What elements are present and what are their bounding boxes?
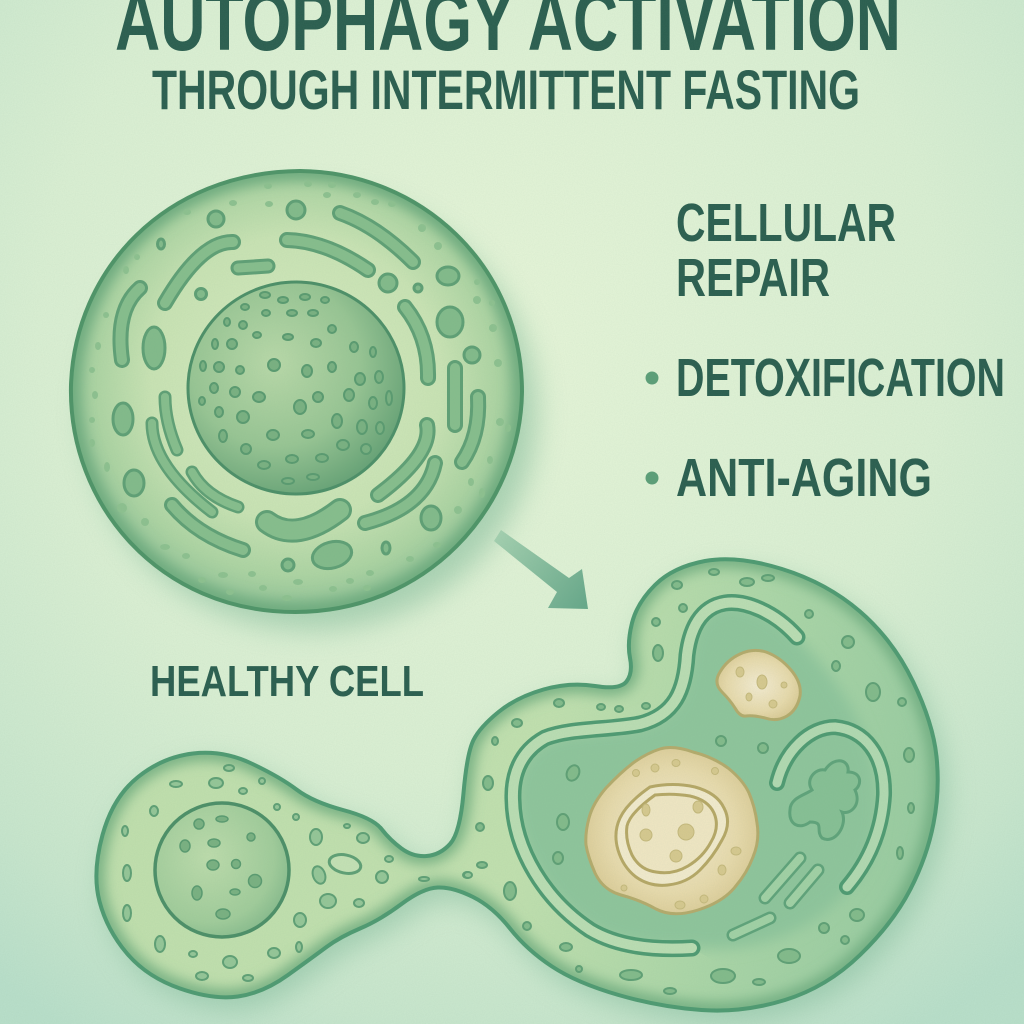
label: healthy cell: HEALTHY CELL xyxy=(150,657,424,706)
heading: repair: REPAIR xyxy=(676,248,830,308)
lumen shading xyxy=(513,603,879,949)
mitochondria outlines xyxy=(120,213,478,550)
vesicles of the large lobe xyxy=(463,569,914,994)
nucleus xyxy=(188,282,404,494)
small nucleus xyxy=(155,803,289,937)
cell body xyxy=(96,559,938,1011)
phagophore double membrane xyxy=(513,603,797,949)
cell membrane xyxy=(71,171,522,612)
arrow xyxy=(494,530,588,609)
membrane edge shading xyxy=(71,171,522,612)
damaged organelle: small xyxy=(717,650,800,720)
body outline xyxy=(96,559,938,1011)
vesicles xyxy=(113,201,480,573)
outlined vesicle xyxy=(327,852,363,876)
small mitochondria inside xyxy=(733,858,818,935)
bullet: anti-aging: ANTI-AGING xyxy=(676,448,932,508)
engulfing membrane right xyxy=(777,727,884,887)
debris organelle xyxy=(790,761,860,839)
peripheral granules xyxy=(89,181,511,601)
mitochondria interiors xyxy=(120,213,478,550)
autophagy cell illustration xyxy=(96,559,946,1023)
membrane outline xyxy=(71,171,522,612)
damaged organelle: large xyxy=(586,748,758,914)
heading: cellular: CELLULAR xyxy=(676,193,896,253)
body edge shading xyxy=(96,559,938,1011)
healthy cell illustration xyxy=(71,171,537,630)
vesicles of the small lobe xyxy=(122,765,472,981)
